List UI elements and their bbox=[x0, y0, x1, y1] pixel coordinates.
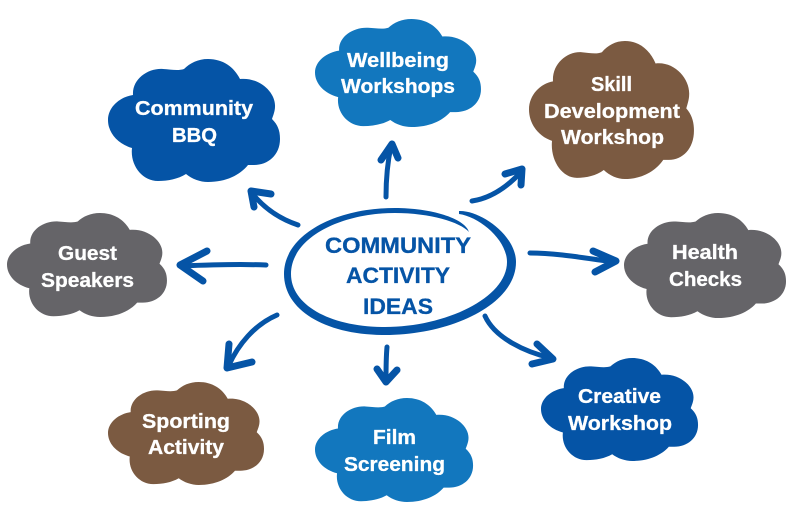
cloud: Film Screening: Film bbox=[373, 427, 416, 449]
cloud: Creative Workshop: Creative bbox=[578, 386, 661, 408]
centre title: IDEAS bbox=[363, 294, 433, 319]
cloud: Guest Speakers: Guest bbox=[58, 243, 117, 265]
arrow: to Sporting Activity bbox=[227, 315, 277, 368]
arrow: to Guest Speakers bbox=[180, 251, 266, 281]
arrow: to Skill Development Workshop bbox=[472, 169, 522, 201]
cloud: Guest Speakers bbox=[7, 213, 167, 317]
cloud: Film Screening bbox=[315, 398, 473, 502]
cloud: Health Checks: Health bbox=[672, 242, 738, 264]
cloud: Wellbeing Workshops: Workshops bbox=[341, 76, 455, 98]
cloud: Guest Speakers: Speakers bbox=[41, 270, 134, 292]
cloud: Skill Development Workshop bbox=[529, 41, 694, 179]
arrow: to Wellbeing Workshops bbox=[381, 144, 398, 197]
cloud: Wellbeing Workshops bbox=[315, 19, 481, 127]
centre: Community Activity Ideas bbox=[284, 208, 516, 335]
cloud: Health Checks: Checks bbox=[669, 269, 742, 291]
cloud: Creative Workshop bbox=[541, 358, 698, 461]
arrow: to Health Checks bbox=[530, 251, 616, 272]
cloud: Wellbeing Workshops: Wellbeing bbox=[347, 50, 449, 72]
cloud: Community BBQ bbox=[108, 59, 280, 182]
hand-drawn ellipse bbox=[284, 208, 516, 335]
cloud: Sporting Activity bbox=[108, 382, 264, 485]
cloud: Creative Workshop: Workshop bbox=[568, 413, 672, 435]
arrow: to Community BBQ bbox=[251, 191, 298, 225]
centre title: ACTIVITY bbox=[346, 263, 450, 288]
cloud: Skill Development Workshop: Workshop bbox=[561, 127, 664, 149]
arrow: to Film Screening bbox=[377, 347, 397, 382]
cloud: Sporting Activity: Activity bbox=[148, 437, 225, 459]
cloud: Skill Development Workshop: Skill bbox=[591, 74, 632, 96]
arrow: to Creative Workshop bbox=[485, 316, 553, 364]
cloud: Skill Development Workshop: Development bbox=[544, 101, 680, 123]
centre title bbox=[325, 233, 471, 319]
cloud: Community BBQ: BBQ bbox=[172, 125, 217, 147]
cloud: Community BBQ: Community bbox=[135, 98, 254, 120]
cloud: Film Screening: Screening bbox=[344, 454, 445, 476]
cloud: Health Checks bbox=[624, 213, 786, 318]
cloud: Sporting Activity: Sporting bbox=[142, 411, 230, 433]
centre title: COMMUNITY bbox=[325, 233, 471, 258]
